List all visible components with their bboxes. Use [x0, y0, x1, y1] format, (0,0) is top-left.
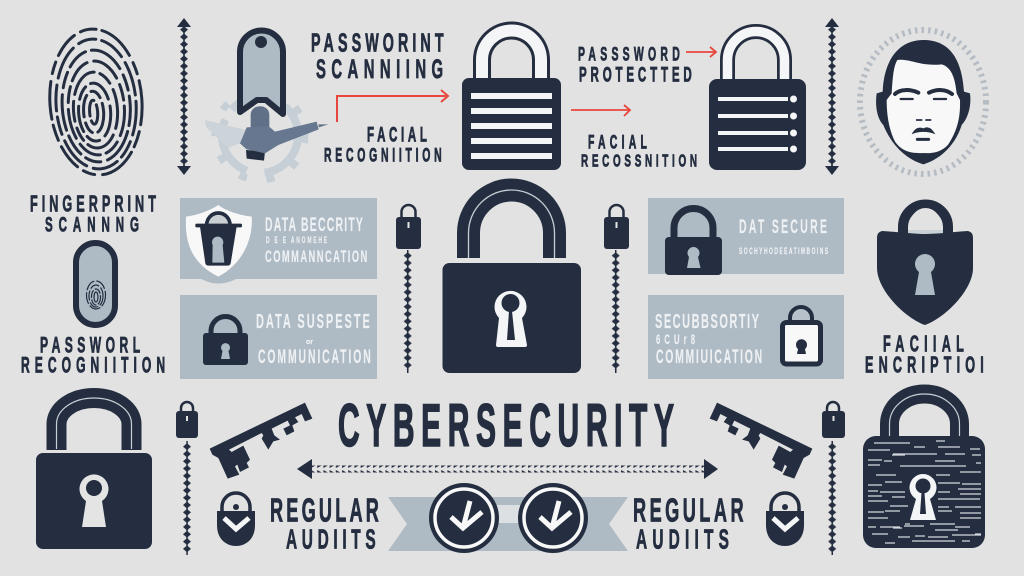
- label: regular audits right: [633, 492, 744, 555]
- icon: small lock chain left: [396, 205, 421, 373]
- label: facial recossnition: [581, 132, 697, 171]
- label: regular audits left: AUDIITS: [286, 524, 376, 555]
- panel text: COMMUNICATION: [258, 347, 371, 368]
- arrow: red centre: [571, 105, 630, 116]
- shield lock icon: [186, 205, 252, 277]
- icon: gear with tag and hammer: [205, 30, 328, 180]
- panel text: DATA SUSPESTE: [256, 311, 370, 333]
- arrow: red elbow: [337, 90, 448, 122]
- heading: passwordint scanning: [311, 29, 444, 84]
- badge: right check: [518, 483, 588, 553]
- panel text: DAT SECURE: [739, 217, 827, 238]
- panel text: D E E ANOMEHE: [266, 234, 327, 245]
- icon: bottom right etched padlock: [863, 394, 985, 548]
- title: cybersecurity: CYBERSECURITY: [338, 393, 674, 460]
- panel: security secure communication: [648, 295, 844, 379]
- label: facial recossnition: FACIAL: [588, 132, 647, 153]
- panel text: DATA BECCRITY: [265, 215, 363, 236]
- panel text: COMMIUICATION: [656, 347, 762, 368]
- panel text: SOCHYHODEEATIMBOINS: [739, 245, 828, 256]
- label: fingerprint scanning: [30, 190, 156, 236]
- badge: left check: [429, 483, 499, 553]
- panel text: SECUBBSORTIY: [655, 311, 759, 333]
- label: password recognition: RECOGNIITION: [21, 353, 165, 377]
- lock icon: [203, 317, 248, 365]
- label: password protected: PASSSWORD: [578, 44, 680, 65]
- label: password protected: [578, 44, 692, 86]
- icon: small lock chain right: [604, 205, 629, 373]
- banner: ribbon with check badges: [388, 483, 628, 553]
- arrow: red to second lock: [686, 47, 729, 57]
- label: password recognition: [21, 333, 165, 377]
- arrow: horizontal double arrow: [297, 459, 718, 479]
- label: password recognition: PASSWORL: [40, 333, 140, 357]
- panel text: [655, 311, 762, 368]
- icon: bottom left padlock: [36, 398, 152, 549]
- label: facial encryption: ENCRIPTIOI: [865, 351, 984, 377]
- panel: data secure: [648, 198, 844, 275]
- label: facial recossnition: RECOSSNITION: [581, 152, 697, 171]
- panel: data security: [180, 198, 377, 284]
- icon: key left: [210, 403, 312, 479]
- icon: small lock chain bottom left: [176, 402, 198, 555]
- label: fingerprint scanning: FINGERPRINT: [30, 190, 156, 216]
- icon: mini shield lock left: [217, 493, 255, 546]
- arrow: vertical beaded double arrow left: [177, 18, 191, 175]
- icon: face in dashed ring: [860, 30, 986, 174]
- icon: fingerprint: [45, 26, 147, 178]
- heading: passwordint scanning: SCANNIING: [316, 53, 443, 84]
- lock icon: [782, 307, 820, 364]
- label: regular audits left: REGULAR: [270, 492, 379, 529]
- icon: striped padlock: [462, 31, 561, 170]
- lock icon: [665, 208, 722, 275]
- icon: server padlock: [709, 32, 806, 170]
- label: password protected: PROTECTTED: [579, 63, 692, 86]
- icon: mini shield lock right: [766, 493, 804, 546]
- label: facial recognition: FACIAL: [367, 123, 427, 146]
- icon: small lock chain bottom right: [822, 402, 845, 555]
- panel text: [265, 215, 367, 266]
- label: facial encryption: [865, 330, 984, 377]
- label: regular audits left: [270, 492, 379, 555]
- panel text: 6CUr8: [656, 333, 695, 348]
- icon: shield padlock: [877, 204, 973, 325]
- label: regular audits right: AUDIITS: [636, 524, 729, 555]
- panel text: [739, 217, 828, 256]
- icon: fingerprint capsule: [76, 243, 115, 325]
- icon: central padlock: [442, 190, 581, 373]
- label: facial encryption: FACIIAL: [883, 330, 964, 356]
- arrow: vertical beaded double arrow right: [825, 18, 839, 175]
- label: facial recognition: RECOGNIITION: [324, 145, 442, 166]
- panel text: or: [306, 339, 313, 346]
- panel text: [256, 311, 371, 368]
- label: regular audits right: REGULAR: [633, 492, 744, 529]
- label: facial recognition: [324, 123, 442, 166]
- panel: data suspense: [180, 295, 377, 379]
- label: fingerprint scanning: SCANNNG: [45, 213, 139, 236]
- heading: passwordint scanning: PASSWORINT: [311, 29, 444, 58]
- panel text: COMMANNCATION: [265, 247, 367, 266]
- icon: key right: [710, 403, 812, 479]
